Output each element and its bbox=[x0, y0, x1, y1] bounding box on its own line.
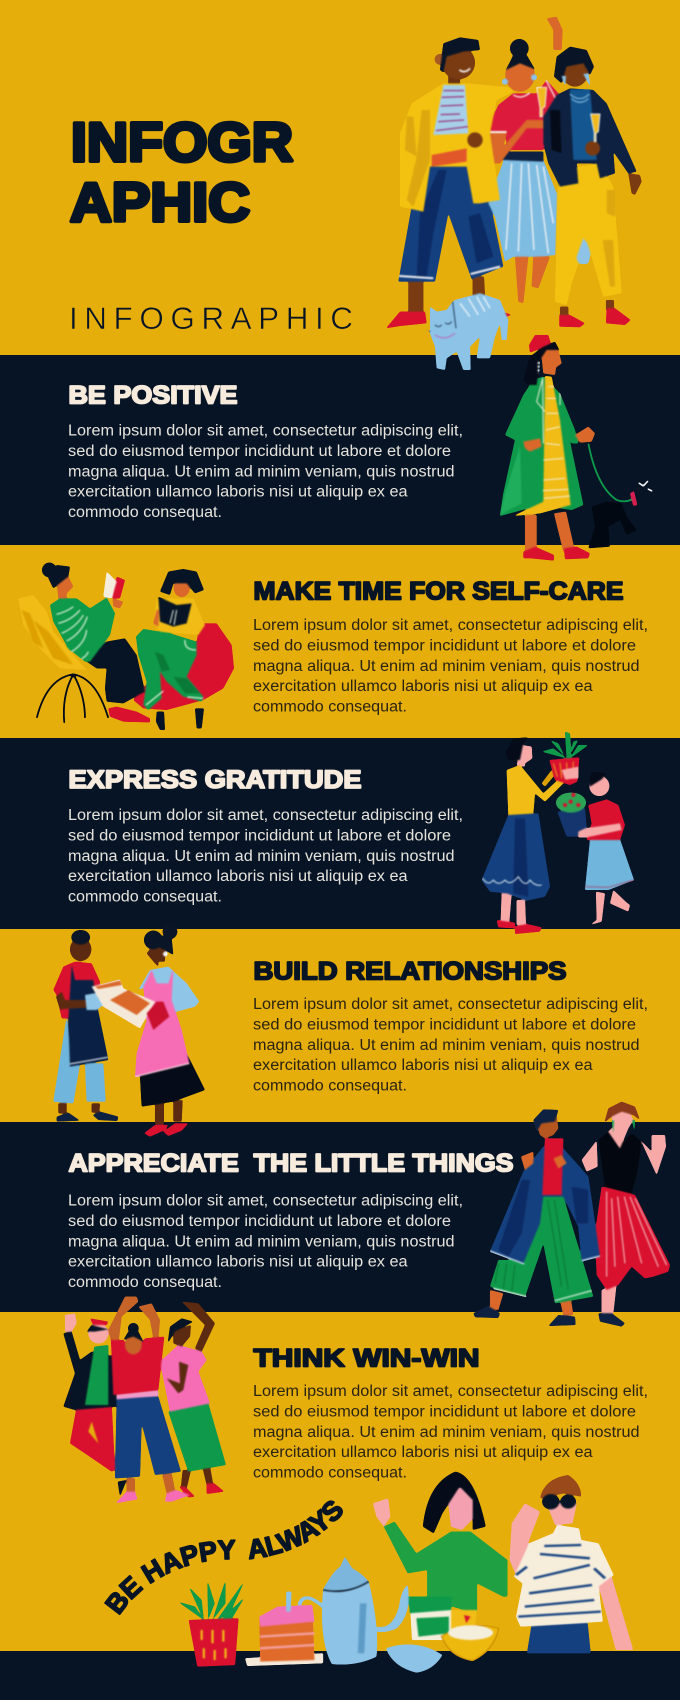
illustration: woman and girl with plants bbox=[482, 732, 634, 934]
illustration: two women reading bbox=[18, 563, 234, 730]
band: footer bbox=[0, 1651, 680, 1700]
cake bbox=[245, 1592, 323, 1666]
left person bbox=[63, 1313, 117, 1472]
title: APHIC bbox=[70, 171, 250, 233]
leash bbox=[588, 443, 633, 501]
chair bbox=[18, 595, 108, 723]
text block: build relationships: Lorem ipsum dolor sit amet, consectetur adipiscing elit, bbox=[253, 996, 648, 1013]
illustration: woman walking dog bbox=[500, 335, 653, 561]
text block: build relationships bbox=[253, 996, 648, 1095]
text block: build relationships: magna aliqua. Ut enim ad minim veniam, quis nostrud bbox=[253, 1037, 640, 1054]
text block: make time for self-care: exercitation ullamco laboris nisi ut aliquip ex ea bbox=[253, 678, 593, 695]
text block: express gratitude: Lorem ipsum dolor sit amet, consectetur adipiscing elit, bbox=[68, 807, 463, 824]
right woman bbox=[136, 569, 205, 730]
text block: express gratitude: sed do eiusmod tempor incididunt ut labore et dolore bbox=[68, 827, 451, 844]
text block: build relationships: commodo consequat. bbox=[253, 1078, 407, 1095]
text block: make time for self-care: Lorem ipsum dolor sit amet, consectetur adipiscing elit, bbox=[253, 617, 648, 634]
heading: build relationships: BUILD RELATIONSHIPS bbox=[254, 958, 566, 986]
illustration: couple walking bbox=[473, 1102, 670, 1327]
text block: be positive: magna aliqua. Ut enim ad minim veniam, quis nostrud bbox=[68, 463, 454, 480]
jar bbox=[409, 1597, 452, 1640]
man in striped shirt bbox=[510, 1475, 633, 1653]
text block: build relationships: sed do eiusmod tempor incididunt ut labore et dolore bbox=[253, 1016, 636, 1033]
text block: appreciate the little things: magna aliqua. Ut enim ad minim veniam, quis nostrud bbox=[68, 1233, 454, 1250]
text block: express gratitude: magna aliqua. Ut enim ad minim veniam, quis nostrud bbox=[68, 848, 454, 865]
band: appreciate the little things bbox=[0, 1122, 680, 1312]
bean bag bbox=[133, 623, 234, 710]
red mitt bbox=[147, 1002, 169, 1030]
woman in green bbox=[373, 1472, 507, 1630]
heading: be positive: BE POSITIVE bbox=[68, 382, 238, 410]
dish bbox=[92, 979, 155, 1028]
man bbox=[53, 930, 118, 1122]
right person bbox=[160, 1302, 226, 1497]
legs and shoes bbox=[523, 512, 590, 561]
beret bbox=[529, 335, 551, 353]
text block: express gratitude: exercitation ullamco laboris nisi ut aliquip ex ea bbox=[68, 868, 408, 885]
text block: be positive: commodo consequat. bbox=[68, 504, 222, 521]
hands bbox=[523, 427, 595, 452]
text block: be positive: Lorem ipsum dolor sit amet, consectetur adipiscing elit, bbox=[68, 422, 463, 440]
cat bbox=[425, 293, 508, 370]
dog bbox=[588, 502, 637, 548]
heading: make time for self-care: MAKE TIME FOR SELF-CARE bbox=[254, 578, 624, 606]
text block: be positive: exercitation ullamco laboris nisi ut aliquip ex ea bbox=[68, 484, 408, 501]
text block: think win-win: magna aliqua. Ut enim ad minim veniam, quis nostrud bbox=[253, 1424, 640, 1441]
text block: build relationships: exercitation ullamco laboris nisi ut aliquip ex ea bbox=[253, 1057, 593, 1074]
text block: think win-win: commodo consequat. bbox=[253, 1465, 407, 1482]
band: be positive bbox=[0, 355, 680, 545]
blue pot plant bbox=[556, 793, 587, 837]
man legs and shoes bbox=[386, 165, 512, 328]
middle person bbox=[108, 1297, 190, 1503]
hair bbox=[523, 342, 559, 385]
illustration: tea party table bbox=[178, 1472, 633, 1673]
text block: make time for self-care: sed do eiusmod tempor incididunt ut labore et dolore bbox=[253, 637, 636, 654]
text block: appreciate the little things: sed do eiusmod tempor incididunt ut labore et dolore bbox=[68, 1213, 451, 1230]
dress bbox=[513, 376, 571, 516]
woman bbox=[482, 737, 567, 934]
text block: make time for self-care bbox=[253, 617, 648, 716]
text block: appreciate the little things: exercitation ullamco laboris nisi ut aliquip ex ea bbox=[68, 1254, 408, 1271]
teapot bbox=[299, 1557, 409, 1665]
heading: think win-win: THINK WIN-WIN bbox=[254, 1344, 480, 1372]
dress stripes and collar bbox=[537, 378, 570, 498]
text block: think win-win: sed do eiusmod tempor incididunt ut labore et dolore bbox=[253, 1403, 636, 1420]
heading: appreciate the little things: APPRECIATE THE LITTLE THINGS bbox=[68, 1150, 514, 1178]
heading: express gratitude: EXPRESS GRATITUDE bbox=[68, 766, 362, 794]
text block: think win-win: exercitation ullamco laboris nisi ut aliquip ex ea bbox=[253, 1444, 593, 1461]
coat shading bbox=[500, 447, 522, 515]
head bbox=[542, 348, 562, 375]
man bbox=[473, 1109, 600, 1326]
title bbox=[70, 111, 293, 233]
illustration: group of three friends and cat bbox=[386, 17, 642, 370]
woman bbox=[135, 924, 205, 1137]
man body bbox=[400, 37, 513, 212]
text block: express gratitude bbox=[68, 807, 463, 906]
band: express gratitude bbox=[0, 738, 680, 929]
dog collar and face bbox=[630, 481, 653, 506]
text block: make time for self-care: commodo consequat. bbox=[253, 699, 407, 716]
title: INFOGR bbox=[71, 111, 293, 173]
right woman bbox=[582, 1102, 670, 1327]
text block: be positive bbox=[68, 422, 463, 521]
coat bbox=[500, 377, 583, 516]
left woman bbox=[42, 563, 150, 722]
curved text: be happy always: BE HAPPY ALWAYS bbox=[104, 1500, 343, 1616]
earring bbox=[536, 362, 542, 373]
cup bbox=[386, 1645, 442, 1673]
text block: make time for self-care: magna aliqua. Ut enim ad minim veniam, quis nostrud bbox=[253, 658, 640, 675]
text block: appreciate the little things bbox=[68, 1192, 463, 1291]
middle woman bbox=[486, 17, 563, 303]
text block: think win-win: Lorem ipsum dolor sit amet, consectetur adipiscing elit, bbox=[253, 1383, 648, 1400]
text block: be positive: sed do eiusmod tempor incididunt ut labore et dolore bbox=[68, 443, 451, 460]
text block: think win-win bbox=[253, 1383, 648, 1482]
girl bbox=[578, 772, 634, 925]
red pot plant bbox=[542, 732, 588, 785]
text block: appreciate the little things: Lorem ipsum dolor sit amet, consectetur adipiscing elit, bbox=[68, 1192, 463, 1210]
right woman bbox=[555, 163, 642, 327]
bowl bbox=[442, 1625, 499, 1661]
illustration: two bakers with dish bbox=[53, 924, 205, 1137]
illustration: three people dancing bbox=[63, 1297, 226, 1503]
text block: appreciate the little things: commodo consequat. bbox=[68, 1274, 222, 1291]
text block: express gratitude: commodo consequat. bbox=[68, 889, 222, 906]
subtitle: INFOGRAPHIC bbox=[69, 300, 353, 336]
right woman jacket and head bbox=[543, 47, 637, 187]
plant in pot bbox=[178, 1580, 245, 1667]
